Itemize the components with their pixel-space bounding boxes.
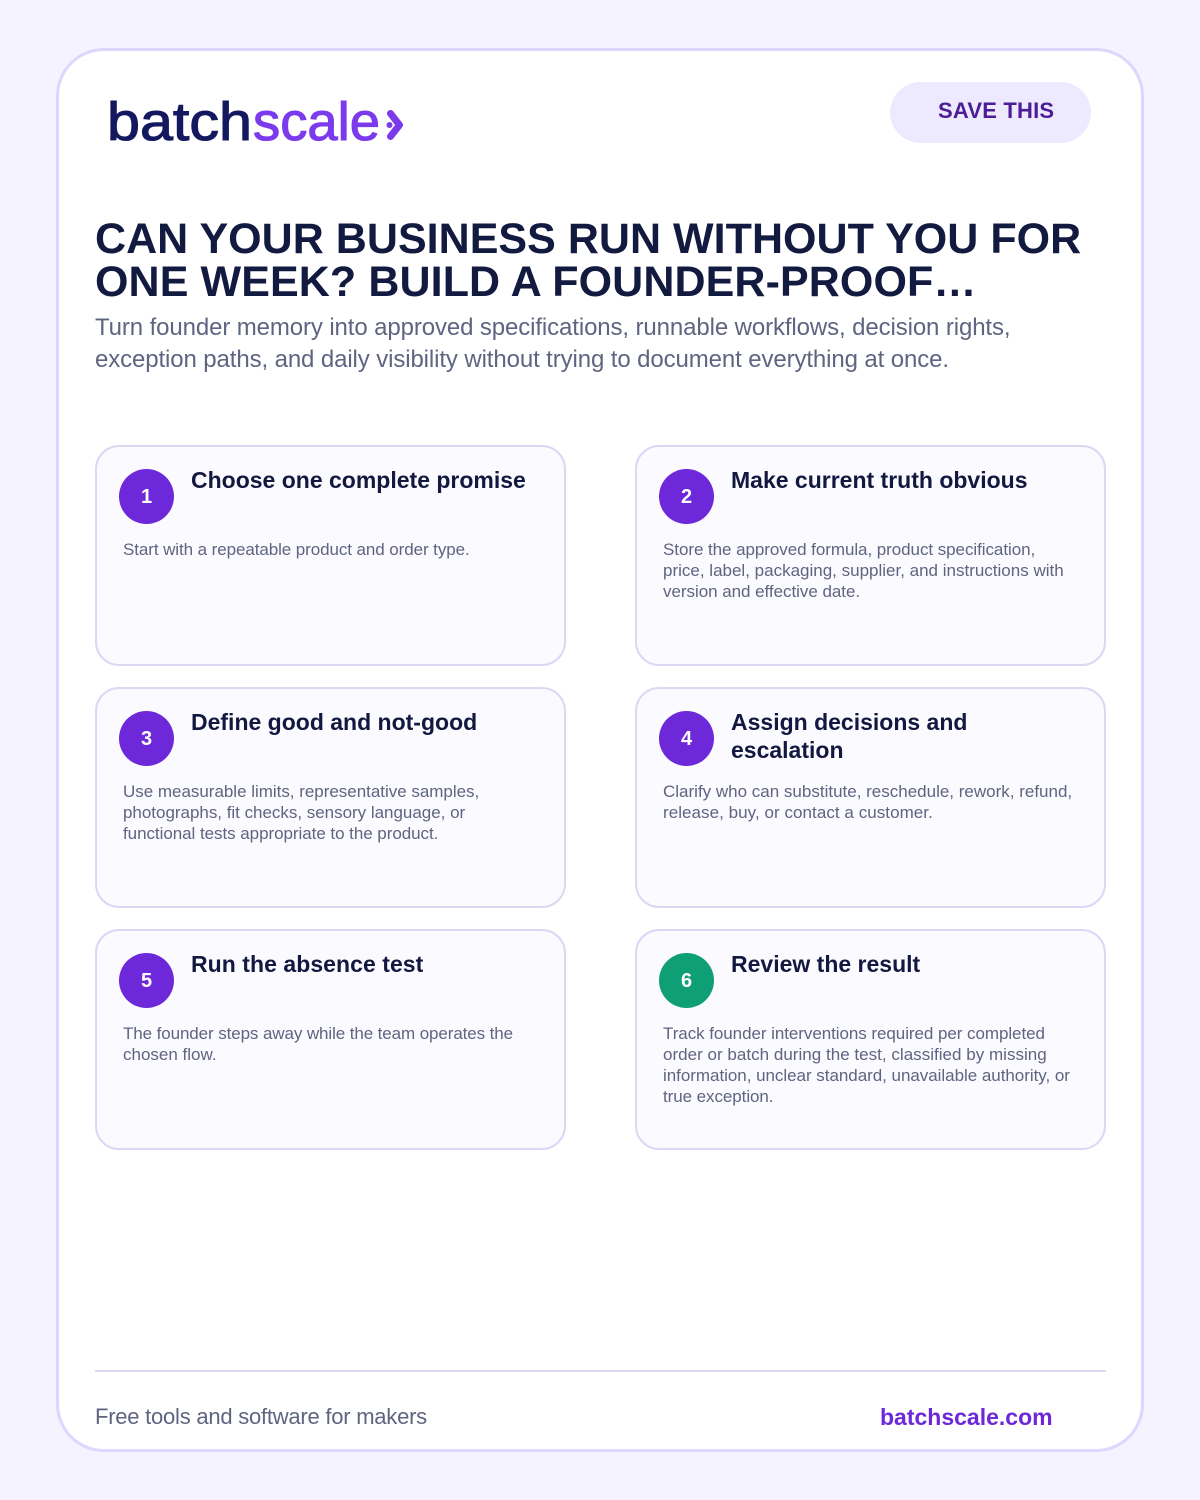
step 3 text: functional tests appropriate to the product. [123, 824, 438, 843]
step 3 text: photographs, fit checks, sensory language, or [123, 803, 465, 822]
panel: step 6 [635, 929, 1106, 1150]
step 5 text: The founder steps away while the team operates the [123, 1024, 513, 1043]
step 3 heading: Define good and not-good [191, 709, 477, 735]
step number 2 [659, 469, 714, 524]
panel: step 1 [95, 445, 566, 666]
step 4 heading: Assign decisions and [731, 709, 967, 735]
save this badge: SAVE THIS [938, 98, 1054, 123]
panel: step 3 [95, 687, 566, 908]
step 4 heading: escalation [731, 737, 844, 763]
title: CAN YOUR BUSINESS RUN WITHOUT YOU FOR [95, 215, 1081, 263]
step 4 text [663, 782, 1072, 822]
panel: step 5 [95, 929, 566, 1150]
logo: batchscale: scale [253, 92, 380, 152]
step 2 heading: Make current truth obvious [731, 467, 1027, 493]
step number 2: 2 [681, 486, 692, 508]
step 6 heading: Review the result [731, 951, 920, 977]
step 5 text [123, 1024, 513, 1064]
step 4 text: release, buy, or contact a customer. [663, 803, 933, 822]
step number 3: 3 [141, 728, 152, 750]
logo: batchscale: batch [107, 92, 252, 152]
step 2 text: Store the approved formula, product specification, [663, 540, 1035, 559]
step 5 text: chosen flow. [123, 1045, 217, 1064]
step 5 heading: Run the absence test [191, 951, 423, 977]
title [95, 215, 1081, 306]
step number 1 [119, 469, 174, 524]
step 4 text: Clarify who can substitute, reschedule, rework, refund, [663, 782, 1072, 801]
step 3 text: Use measurable limits, representative samples, [123, 782, 479, 801]
step number 6 [659, 953, 714, 1008]
save this badge [890, 82, 1091, 143]
subtitle: exception paths, and daily visibility without trying to document everything at once. [95, 346, 949, 373]
step 3 text [123, 782, 479, 843]
subtitle: Turn founder memory into approved specifications, runnable workflows, decision rights, [95, 314, 1010, 341]
step 6 text: information, unclear standard, unavailable authority, or [663, 1066, 1070, 1085]
step 6 text [663, 1024, 1070, 1106]
title: ONE WEEK? BUILD A FOUNDER-PROOF… [95, 258, 976, 306]
logo: batchscale [107, 92, 404, 152]
step number 4: 4 [681, 728, 692, 750]
step number 5: 5 [141, 970, 152, 992]
step 1 heading: Choose one complete promise [191, 467, 526, 493]
step number 4 [659, 711, 714, 766]
footer link: batchscale.com [880, 1404, 1053, 1430]
step number 1: 1 [141, 486, 152, 508]
footer tagline: Free tools and software for makers [95, 1404, 427, 1429]
step 2 text: price, label, packaging, supplier, and instructions with [663, 561, 1064, 580]
step 4 heading [731, 709, 967, 763]
step 6 text: Track founder interventions required per completed [663, 1024, 1045, 1043]
step 6 text: order or batch during the test, classified by missing [663, 1045, 1047, 1064]
step number 5 [119, 953, 174, 1008]
step number 6: 6 [681, 970, 692, 992]
panel: step 2 [635, 445, 1106, 666]
step number 3 [119, 711, 174, 766]
footer divider [95, 1370, 1106, 1372]
subtitle [95, 314, 1010, 373]
panel: step 4 [635, 687, 1106, 908]
step 1 text: Start with a repeatable product and order type. [123, 540, 470, 559]
step 2 text: version and effective date. [663, 582, 860, 601]
step 6 text: true exception. [663, 1087, 773, 1106]
step 2 text [663, 540, 1064, 601]
